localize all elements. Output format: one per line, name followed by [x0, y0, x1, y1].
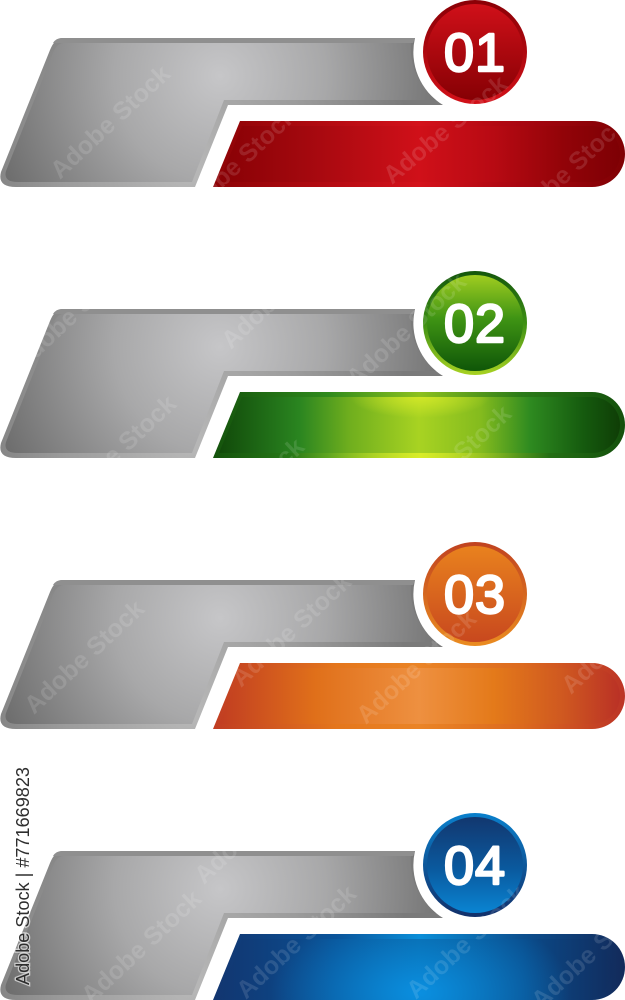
watermark text: Adobe Stock	[45, 60, 176, 184]
panel: row 03	[0, 542, 625, 729]
number badge 03	[423, 542, 527, 646]
number badge 02	[423, 271, 527, 375]
number badge 02: 02	[444, 294, 506, 354]
panel: row 01	[0, 0, 625, 187]
watermark text: Adobe Stock	[386, 400, 517, 524]
watermark text: Adobe Stock	[51, 390, 182, 514]
watermark text: Adobe Stock	[226, 568, 357, 692]
grey label panel 01	[0, 38, 443, 187]
watermark text: Adobe Stock	[216, 230, 347, 354]
number badge 01: 01	[444, 23, 506, 83]
watermark text: Adobe Stock	[179, 433, 310, 557]
grey label panel 03	[0, 580, 443, 729]
watermark text: Adobe Stock	[189, 765, 320, 889]
watermark text: Adobe Stock	[7, 252, 138, 376]
grey label panel 04	[0, 851, 443, 1000]
panel: row 02	[0, 271, 625, 458]
watermark text: Adobe Stock	[341, 268, 472, 392]
number badge 03: 03	[444, 565, 506, 625]
number badge 04: 04	[444, 836, 506, 896]
watermark text: Adobe Stock	[171, 102, 302, 226]
number badge 04	[423, 813, 527, 917]
grey label panel 02	[0, 309, 443, 458]
blue ribbon bar 04	[213, 934, 625, 1000]
red ribbon bar 01	[213, 121, 625, 187]
vertical stock credit: Adobe Stock | #771669823	[13, 767, 33, 985]
number badge 01	[423, 0, 527, 104]
watermark text: Adobe Stock	[378, 70, 513, 190]
green ribbon bar 02	[213, 392, 625, 458]
orange ribbon bar 03	[213, 663, 625, 729]
panel: row 04	[0, 813, 625, 1000]
watermark text: Adobe Stock	[19, 595, 150, 719]
watermark text: Adobe Stock	[351, 605, 482, 729]
